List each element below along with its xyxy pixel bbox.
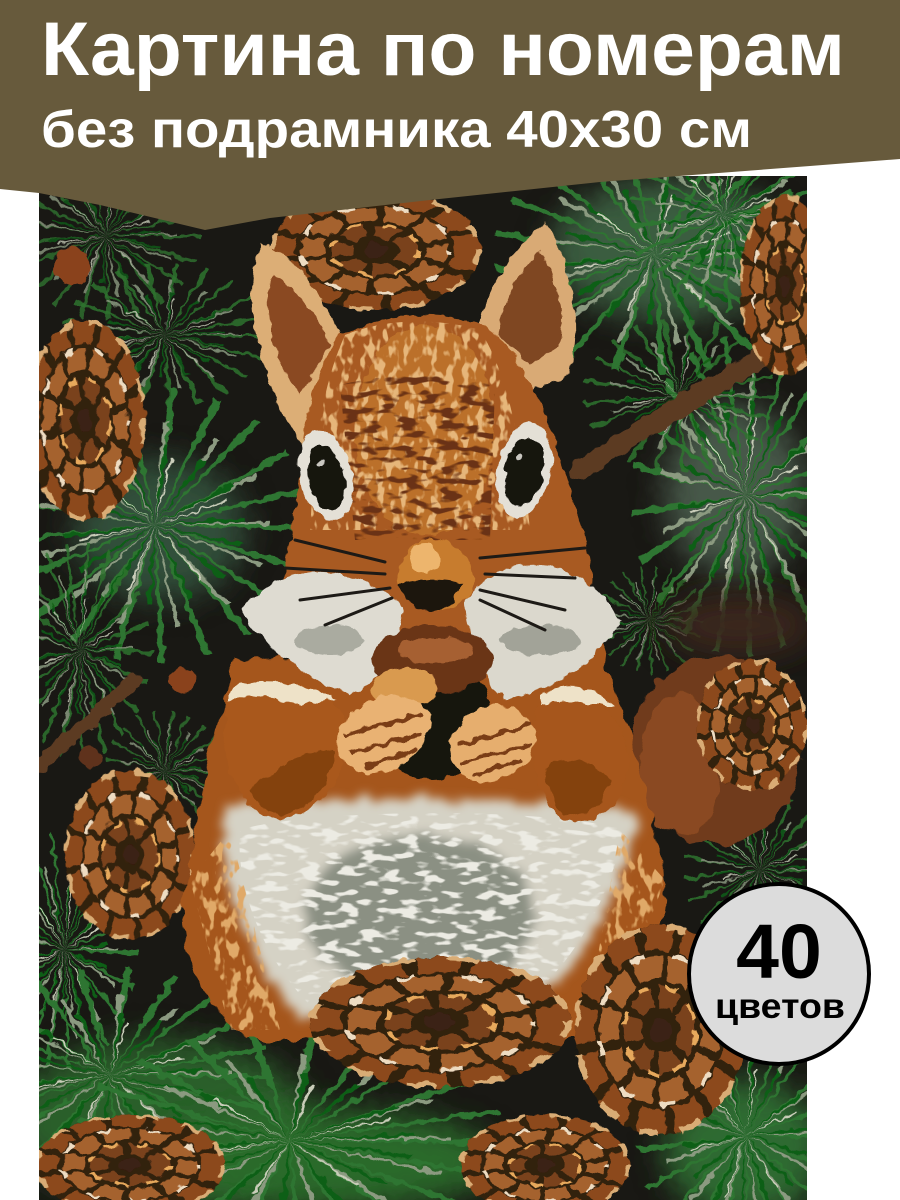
shadowed bark behind the tail bbox=[665, 593, 815, 657]
squirrel head bbox=[283, 316, 592, 665]
eyes bbox=[296, 421, 554, 521]
squirrel body bbox=[182, 640, 664, 1040]
badge: 40 colours bbox=[689, 884, 869, 1064]
head fur texture bbox=[310, 322, 530, 530]
squirrel ears bbox=[252, 222, 575, 445]
pine foliage background bbox=[10, 167, 825, 1200]
pine cones behind the squirrel bbox=[25, 190, 830, 940]
muzzle and nose bbox=[397, 538, 475, 612]
belly fur bbox=[223, 799, 640, 1020]
acorn bbox=[371, 626, 492, 780]
branches bbox=[40, 350, 775, 765]
pine cones in front bbox=[35, 925, 745, 1200]
painting: squirrel with pine cones bbox=[10, 167, 830, 1200]
berries bbox=[53, 247, 195, 768]
squirrel arms bbox=[225, 681, 628, 822]
squirrel tail bbox=[630, 655, 800, 845]
title: Картина по номерам bbox=[41, 7, 845, 92]
whiskers bbox=[285, 540, 585, 630]
belly fur texture bbox=[239, 813, 625, 1005]
badge: 40 colours: цветов bbox=[715, 987, 845, 1026]
badge: 40 colours: 40 bbox=[736, 909, 822, 995]
header banner bbox=[0, 0, 900, 230]
head dark fur flecks bbox=[340, 375, 495, 540]
subtitle: без подрамника 40х30 см bbox=[41, 101, 752, 159]
body side fur texture bbox=[190, 830, 665, 1030]
white cheeks bbox=[240, 564, 622, 700]
paws bbox=[337, 695, 536, 781]
pine cone on tail bbox=[697, 660, 807, 790]
